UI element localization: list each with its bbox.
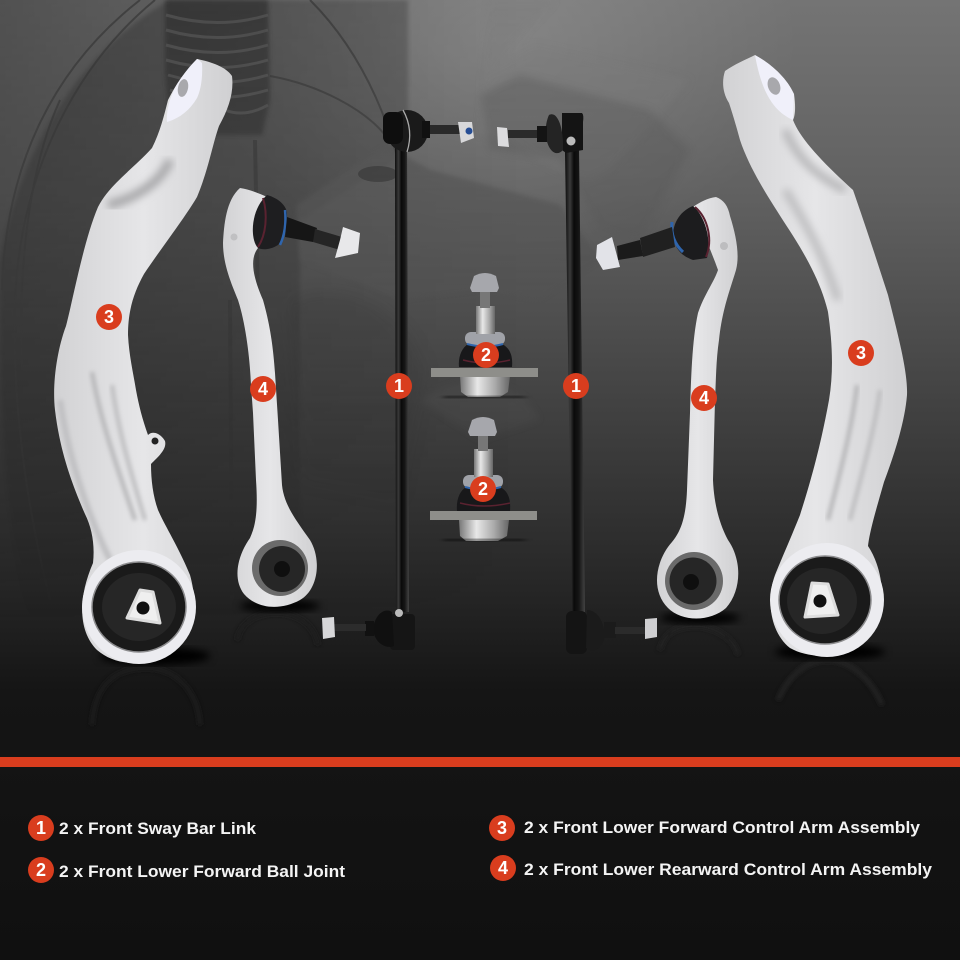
legend bbox=[28, 815, 933, 883]
callout badge 1 left: 1 bbox=[394, 376, 404, 396]
legend item 4 bbox=[490, 855, 933, 881]
callout badge 2 upper bbox=[473, 342, 499, 368]
right rearward control arm bbox=[596, 197, 738, 618]
legend item 2: 2 bbox=[36, 860, 46, 880]
background bbox=[0, 0, 960, 666]
legend item 2 bbox=[28, 857, 345, 883]
callout badge 4 left: 4 bbox=[258, 379, 268, 399]
footer divider band bbox=[0, 757, 960, 767]
left sway bar link bbox=[322, 110, 474, 650]
callout badge 3 left bbox=[96, 304, 122, 330]
callout badge 4 right bbox=[691, 385, 717, 411]
right sway bar link bbox=[497, 113, 657, 654]
callout badge 1 right bbox=[563, 373, 589, 399]
callout badge 2 upper: 2 bbox=[481, 345, 491, 365]
legend item 4: 4 bbox=[498, 858, 508, 878]
callout badge 2 lower bbox=[470, 476, 496, 502]
upper ball joint bbox=[431, 273, 538, 398]
callout badge 2 lower: 2 bbox=[478, 479, 488, 499]
lower ball joint bbox=[430, 417, 537, 541]
callout badge 1 right: 1 bbox=[571, 376, 581, 396]
legend item 1: 2 x Front Sway Bar Link bbox=[59, 819, 257, 838]
legend item 1 bbox=[28, 815, 257, 841]
reflections under control arms bbox=[92, 600, 885, 725]
callout badge 4 left bbox=[250, 376, 276, 402]
callout badge 4 right: 4 bbox=[699, 388, 709, 408]
legend item 1: 1 bbox=[36, 818, 46, 838]
callout badge 3 right: 3 bbox=[856, 343, 866, 363]
left rearward control arm bbox=[223, 188, 360, 607]
callout badge 1 left bbox=[386, 373, 412, 399]
left forward control arm bbox=[54, 58, 232, 664]
background: ghosted suspension photo bbox=[1, 0, 674, 422]
callout badge 3 left: 3 bbox=[104, 307, 114, 327]
callout badge 3 right bbox=[848, 340, 874, 366]
legend item 3: 3 bbox=[497, 818, 507, 838]
right forward control arm bbox=[723, 55, 907, 657]
legend item 3 bbox=[489, 815, 921, 841]
part number callouts on photo bbox=[96, 304, 874, 502]
legend item 4: 2 x Front Lower Rearward Control Arm Assembly bbox=[524, 860, 933, 879]
legend item 2: 2 x Front Lower Forward Ball Joint bbox=[59, 862, 345, 881]
legend item 3: 2 x Front Lower Forward Control Arm Assembly bbox=[524, 818, 921, 837]
